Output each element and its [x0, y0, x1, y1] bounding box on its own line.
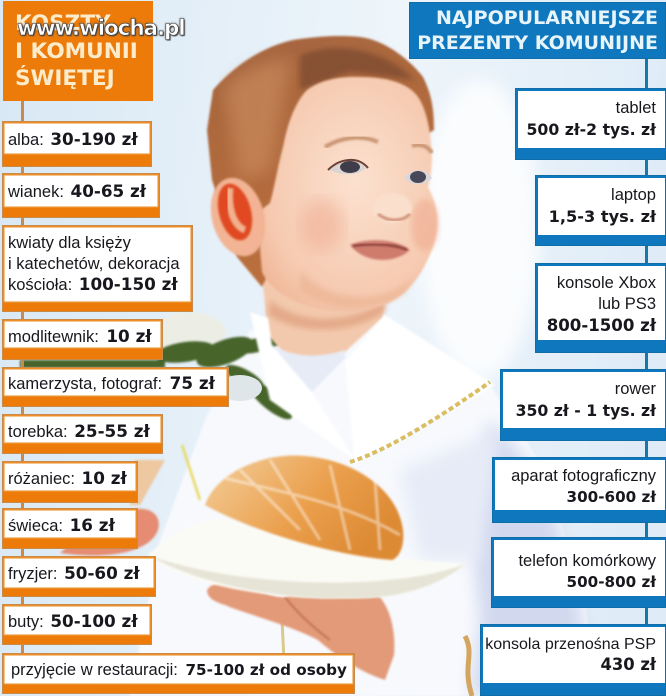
robe [130, 318, 595, 696]
flowers and leaves [20, 312, 297, 500]
heading text: KOSZTY [15, 11, 111, 36]
ear [203, 172, 273, 262]
right hand under the plate [207, 581, 394, 680]
cost: torebka [2, 414, 163, 454]
cost: kwiaty: kwiaty dla księży [8, 234, 131, 252]
gift: konsole: 800-1500 zł [547, 316, 656, 335]
gift: tablet: 500 zł-2 tys. zł [527, 120, 656, 139]
cost: modlitewnik: modlitewnik: 10 zł [8, 326, 152, 346]
left connector line [21, 100, 24, 655]
heading text: I KOMUNII [15, 38, 138, 64]
panel: communion costs heading [3, 1, 153, 101]
cost: różaniec [2, 461, 138, 503]
cost: kwiaty: i katechetów, dekoracja [8, 254, 180, 272]
head [203, 36, 439, 372]
cost: buty [2, 604, 152, 645]
gift: tablet: tablet [616, 99, 656, 117]
heading text: PREZENTY KOMUNIJNE [417, 32, 658, 54]
gift: aparat: aparat fotograficzny [511, 467, 656, 485]
gift: konsola: konsola przenośna PSP [485, 636, 656, 653]
gift: rower: 350 zł - 1 tys. zł [516, 401, 656, 420]
cost: przyjęcie: przyjęcie w restauracji: 75-100 zł od osoby [11, 661, 347, 679]
gift: laptop: laptop [611, 186, 656, 204]
watermark: www.wiocha.pl [17, 16, 185, 41]
gift: konsola [480, 624, 666, 696]
cost: modlitewnik [2, 319, 163, 360]
left hand [60, 460, 165, 555]
cost: kamerzysta [2, 367, 229, 407]
gift: konsola: 430 zł [600, 655, 656, 674]
cost: kwiaty [2, 225, 193, 312]
cost: alba [2, 121, 152, 167]
gift: laptop [535, 175, 666, 246]
heading text [417, 7, 658, 54]
gift: aparat: 300-600 zł [567, 488, 656, 506]
cost: torebka: torebka: 25-55 zł [8, 421, 150, 441]
gift: telefon: telefon komórkowy [518, 552, 656, 570]
panel: popular gifts heading [409, 2, 666, 59]
cost: świeca: świeca: 16 zł [8, 515, 115, 535]
cost: kamerzysta: kamerzysta, fotograf: 75 zł [8, 373, 215, 393]
heading text: ŚWIĘTEJ [15, 66, 115, 91]
gift: konsole: lub PS3 [598, 295, 656, 313]
heading text: NAJPOPULARNIEJSZE [436, 7, 658, 29]
collar and gold trim [250, 312, 495, 696]
gift: konsole [535, 263, 666, 353]
bread on plate [148, 456, 465, 598]
cost: różaniec: różaniec: 10 zł [8, 468, 127, 488]
cost: wianek [2, 173, 160, 218]
cost: alba: alba: 30-190 zł [8, 129, 138, 149]
gift: aparat [492, 457, 666, 523]
gift: rower: rower [615, 380, 656, 398]
gift: telefon: 500-800 zł [567, 573, 656, 591]
cost: fryzjer [2, 556, 156, 597]
cost: przyjęcie [2, 653, 355, 694]
cost: buty: buty: 50-100 zł [8, 611, 138, 631]
cost: świeca [2, 508, 138, 549]
gift: telefon [491, 537, 666, 608]
cost: kwiaty: kościoła: 100-150 zł [8, 274, 178, 294]
gift: rower [500, 369, 666, 441]
gift: laptop: 1,5-3 tys. zł [549, 207, 656, 226]
cost: wianek: wianek: 40-65 zł [8, 181, 146, 201]
right connector line [645, 58, 648, 628]
cost: fryzjer: fryzjer: 50-60 zł [8, 563, 140, 583]
gift: konsole: konsole Xbox [557, 274, 656, 292]
heading text [15, 11, 138, 91]
gift: tablet [515, 88, 666, 160]
eyes, nose and mouth [325, 138, 432, 260]
